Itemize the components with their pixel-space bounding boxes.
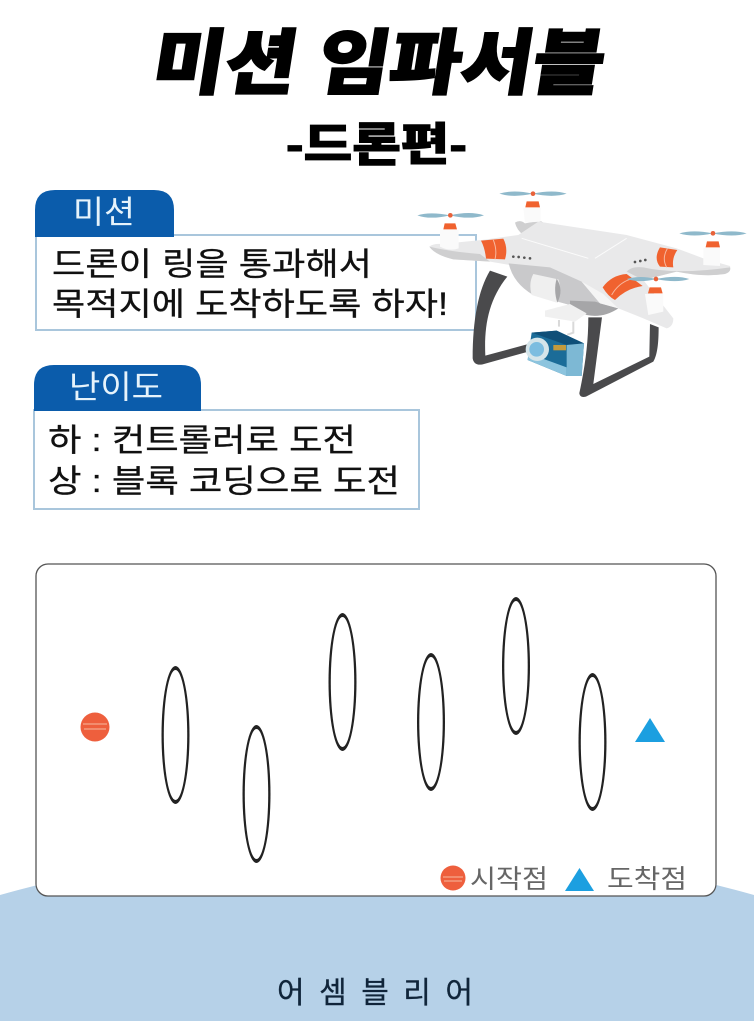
drone battery bbox=[530, 274, 560, 303]
mission description: 드론이 링을 통과해서 bbox=[52, 246, 372, 282]
legend bbox=[440, 864, 687, 894]
background: blue hill footer bbox=[0, 842, 754, 1021]
panel: difficulty bbox=[34, 365, 419, 509]
drone motors bbox=[440, 208, 720, 315]
mission tab label: 미션 bbox=[73, 194, 135, 230]
difficulty tab label: 난이도 bbox=[69, 369, 163, 405]
icon: drone illustration bbox=[417, 191, 747, 397]
mission text box bbox=[36, 235, 476, 330]
difficulty description: 상 : 블록 코딩으로 도전 bbox=[48, 463, 400, 499]
drone camera bbox=[526, 320, 584, 376]
drone right leg bbox=[579, 317, 659, 397]
drone rear arm bbox=[515, 221, 550, 235]
title: 미션 임파서블 bbox=[147, 24, 611, 104]
difficulty text box bbox=[34, 410, 419, 509]
footer brand: 어 셈 블 리 어 bbox=[277, 977, 473, 1010]
rings bbox=[162, 597, 606, 863]
drone left arm underside bbox=[429, 247, 490, 262]
legend start icon bbox=[440, 866, 466, 890]
drone right arm underside bbox=[627, 267, 730, 280]
legend start label: 시작점 bbox=[470, 864, 548, 894]
difficulty description: 하 : 컨트롤러로 도전 bbox=[48, 422, 356, 458]
drone rotors bbox=[417, 191, 747, 293]
subtitle: -드론편- bbox=[286, 119, 467, 170]
drone orange arm bands bbox=[481, 239, 677, 300]
drone left leg bbox=[473, 271, 528, 365]
drone band highlights bbox=[493, 240, 667, 295]
difficulty tab bbox=[34, 365, 201, 411]
drone underbody bbox=[509, 263, 600, 305]
start point marker bbox=[80, 712, 110, 742]
mission tab bbox=[35, 190, 174, 237]
mission description bbox=[52, 246, 448, 322]
panel: mission bbox=[35, 190, 476, 330]
mission description: 목적지에 도착하도록 하자! bbox=[52, 286, 448, 322]
panel: ring course map bbox=[36, 564, 716, 896]
drone body bbox=[429, 222, 730, 328]
legend finish icon bbox=[565, 868, 594, 891]
drone white front strip bbox=[582, 282, 618, 308]
drone gimbal mount bbox=[545, 304, 587, 322]
legend finish label: 도착점 bbox=[607, 864, 687, 894]
drone vent dots bbox=[512, 255, 647, 263]
difficulty description bbox=[48, 422, 400, 499]
drone lower bowl bbox=[570, 301, 618, 316]
drone body top lines bbox=[522, 238, 627, 258]
finish point marker bbox=[635, 718, 665, 742]
